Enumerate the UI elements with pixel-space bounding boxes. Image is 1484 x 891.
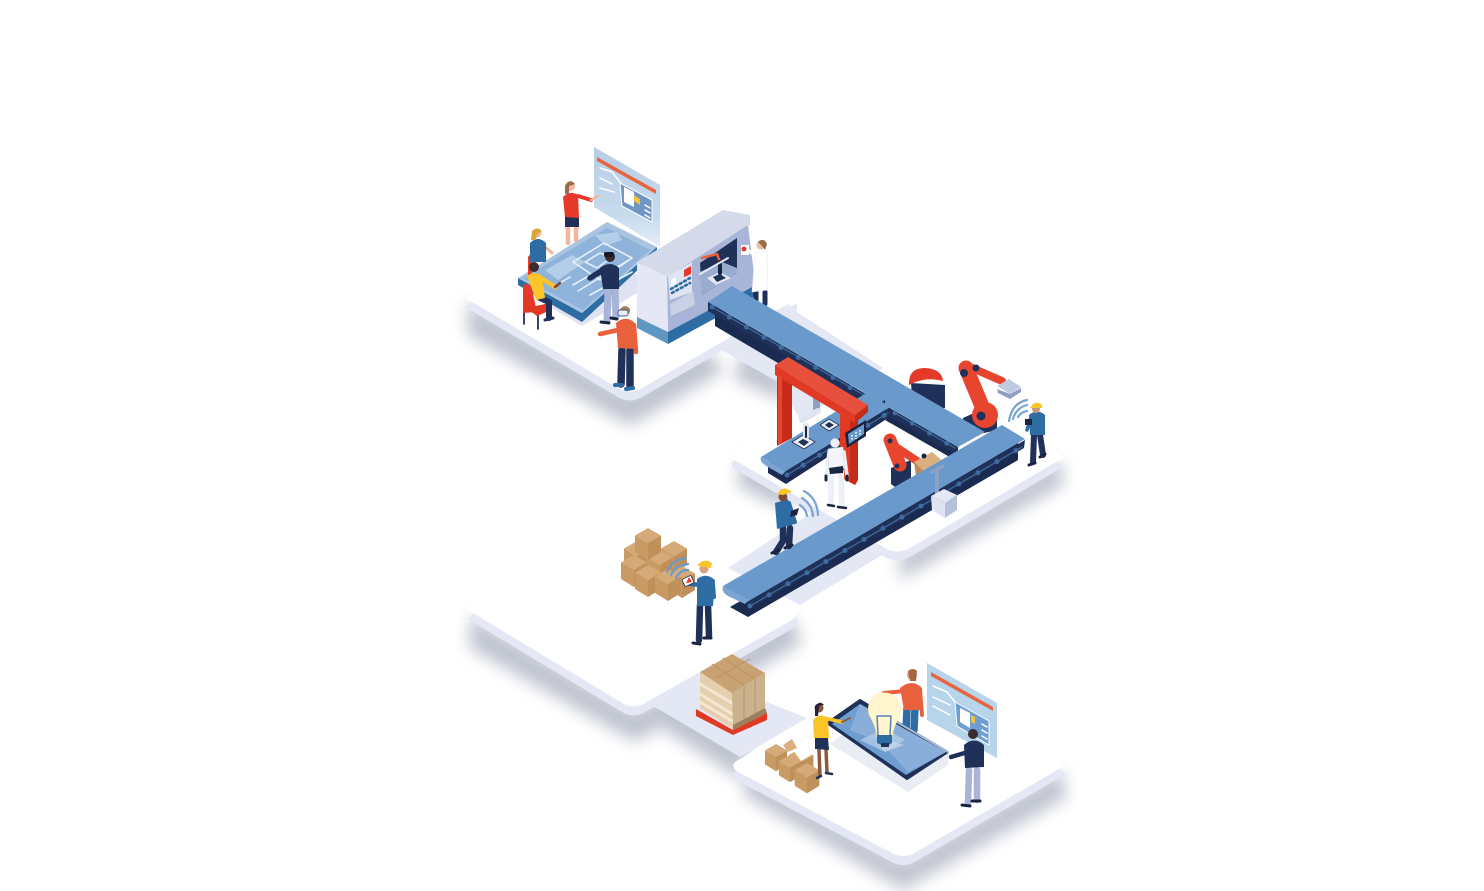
short conveyor branch xyxy=(761,392,890,484)
person: man in navy at table xyxy=(590,252,619,323)
robot base behind conveyor xyxy=(909,368,945,412)
machine: work window xyxy=(700,238,737,295)
red gantry xyxy=(775,357,868,485)
platform: pallet tile xyxy=(648,675,807,757)
gantry back leg xyxy=(777,373,792,446)
wifi signal, right worker xyxy=(1009,400,1027,421)
robot arm with gripper xyxy=(960,364,1021,434)
lower long conveyor xyxy=(723,425,1025,617)
stacked cardboard boxes xyxy=(621,528,695,601)
machine: CNC cell xyxy=(637,210,756,344)
platform: production line xyxy=(732,400,1063,560)
sensor cabinet on post xyxy=(931,466,957,518)
person: woman in blue at table xyxy=(528,228,552,275)
lavender strip under upper conveyor xyxy=(718,303,883,420)
upper conveyor xyxy=(708,286,985,460)
wifi signal, scanner xyxy=(667,558,688,578)
machine: control panel xyxy=(668,262,695,316)
lavender strip under lower conveyor xyxy=(728,512,887,605)
glowing light bulb xyxy=(869,693,904,752)
worker scanning boxes xyxy=(682,561,715,644)
person: man in orange behind phone xyxy=(884,669,922,730)
wifi signal, left worker xyxy=(800,491,818,516)
person: woman in red pointing at screen xyxy=(563,181,598,243)
worker with hard hat and tablet, left xyxy=(772,488,799,553)
platform shadows xyxy=(468,300,1066,890)
smartphone lying flat xyxy=(827,700,948,792)
platform: delivery and customer xyxy=(733,640,1066,865)
person: woman in yellow at phone xyxy=(813,703,850,778)
digital design table xyxy=(518,222,657,326)
touch screen on gantry xyxy=(845,420,866,448)
platform: design area xyxy=(465,190,795,400)
small red robot arm with box xyxy=(888,438,944,487)
shrink-wrapped pallet xyxy=(696,654,767,735)
humanoid robot xyxy=(826,438,847,508)
holographic screen: customer xyxy=(927,663,997,758)
small boxes, one open xyxy=(765,739,819,793)
worker with hard hat, right xyxy=(1025,403,1045,465)
person: technician in lab coat xyxy=(741,240,768,306)
holographic screen: design xyxy=(594,147,660,247)
person: man in yellow sitting on chair xyxy=(523,262,560,329)
person: man in orange with VR headset xyxy=(600,306,636,389)
person: man in navy at phone xyxy=(951,729,984,806)
work stations with cobot xyxy=(792,397,839,449)
platform: warehouse xyxy=(468,480,797,716)
